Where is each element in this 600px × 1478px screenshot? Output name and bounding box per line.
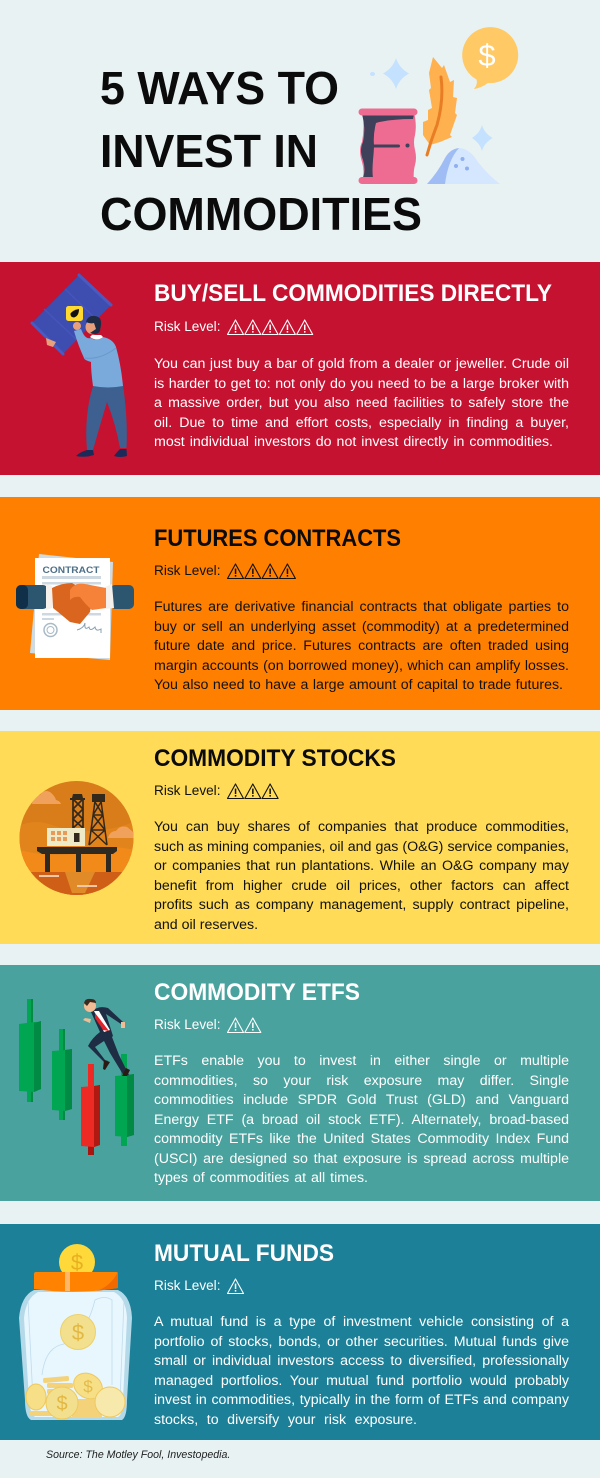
icon: dollar speech bubble xyxy=(462,27,518,89)
text block: commodities, so your risk exposure may differ. Single xyxy=(154,1072,569,1088)
text block: ETFs enable you to invest in either single or multiple xyxy=(154,1053,569,1069)
icon: glass jar with coins: $ xyxy=(71,1250,83,1275)
text block: a massive order, but you also need facilities to safely store the xyxy=(154,395,569,411)
risk level: one warning triangle xyxy=(227,1278,244,1294)
icon: barrel xyxy=(358,108,418,184)
text block: (USCI) are designed so that exposure is spread across multiple xyxy=(154,1150,569,1166)
text block: commodity ETFs like the United States Commodity Index Fund xyxy=(154,1131,569,1147)
risk level label: Risk Level: xyxy=(154,563,220,578)
panel: futures contracts xyxy=(0,497,600,710)
text block: Futures are derivative financial contracts that obligate parties to xyxy=(154,599,569,615)
text block xyxy=(154,599,569,693)
text block: benefit from higher crude oil prices, other factors can affect xyxy=(154,878,569,894)
text block: commodities include SPDR Gold Trust (GLD) and Vanguard xyxy=(154,1092,569,1108)
text block xyxy=(154,819,569,932)
panel: commodity stocks xyxy=(0,731,600,944)
risk level label: Risk Level: xyxy=(154,1278,220,1293)
risk level label: Risk Level: xyxy=(154,319,220,334)
text block: such as mining companies, oil and gas (O&G) service companies, xyxy=(154,838,569,854)
text block: or companies that run plantations. While an O&G company may xyxy=(154,858,569,874)
risk level: four warning triangles xyxy=(227,563,296,579)
risk level: two warning triangles xyxy=(227,1017,262,1033)
panel: commodity etfs xyxy=(0,965,600,1201)
title: COMMODITIES xyxy=(100,188,422,240)
text block: small or individual investors access to diversified, professionally xyxy=(154,1353,569,1369)
text block: portfolio of stocks, bonds, or other securities. Mutual funds give xyxy=(154,1334,569,1350)
icon: feather xyxy=(423,57,457,155)
risk level: five warning triangles xyxy=(227,319,314,335)
icon: glass jar with coins: $ xyxy=(56,1393,68,1415)
heading: COMMODITY STOCKS xyxy=(154,745,396,772)
icon: man carrying oil barrel xyxy=(30,273,127,457)
text block xyxy=(154,1314,570,1428)
title: INVEST IN xyxy=(100,125,318,177)
panel: mutual funds xyxy=(0,1224,600,1440)
text block: types of commodities at all times. xyxy=(154,1170,368,1186)
text block: You also need to have a large amount of capital to trade futures. xyxy=(154,677,563,693)
text block: most individual investors do not invest directly in commodities. xyxy=(154,434,553,450)
icon: glass jar with coins: $ xyxy=(72,1320,84,1345)
text block: Energy ETF (a broad oil stock ETF). Alternately, broad-based xyxy=(154,1112,569,1128)
heading: COMMODITY ETFS xyxy=(154,979,360,1006)
text block: stocks, to diversify your risk exposure. xyxy=(154,1412,417,1428)
text block: margin accounts (on borrowed money), which can amplify losses. xyxy=(154,658,569,674)
heading: MUTUAL FUNDS xyxy=(154,1240,334,1267)
risk level label: Risk Level: xyxy=(154,783,220,798)
source note: Source: The Motley Fool, Investopedia. xyxy=(46,1449,230,1461)
text block: invest in commodities, typically in the form of ETFs and company xyxy=(154,1392,569,1408)
icon: offshore oil rig xyxy=(20,781,134,895)
icon: contract and handshake: CONTRACT xyxy=(42,565,100,576)
text block: is harder to get to: not only do you need to be a large broker with xyxy=(154,376,569,392)
icon: candlestick chart with running businessman xyxy=(19,998,134,1155)
text block: managed portfolios. Your mutual fund portfolio would probably xyxy=(154,1372,569,1388)
icon: glass jar with coins: $ xyxy=(83,1377,93,1396)
icon: commodities illustration with barrel, feather, pile and dollar bubble xyxy=(358,27,518,184)
text block: buy or sell an underlying asset (commodity) at a predetermined xyxy=(154,618,569,634)
title xyxy=(100,62,422,240)
icon: dollar speech bubble: $ xyxy=(478,38,496,73)
text block: future date and price. Futures contracts are often traded using xyxy=(154,638,569,654)
text block xyxy=(154,356,569,450)
icon: glass jar with coins xyxy=(19,1244,132,1420)
risk level: three warning triangles xyxy=(227,783,279,799)
text block: You can just buy a bar of gold from a dealer or jeweller. Crude oil xyxy=(154,356,569,372)
icon: contract and handshake xyxy=(16,554,134,660)
text block: A mutual fund is a type of investment vehicle consisting of a xyxy=(154,1314,569,1330)
risk level label: Risk Level: xyxy=(154,1017,220,1032)
panel: buy/sell commodities directly xyxy=(0,262,600,475)
text block: oil. Due to time and effort costs, especially in finding a buyer, xyxy=(154,414,569,430)
title: 5 WAYS TO xyxy=(100,62,339,114)
icon: sparkles xyxy=(370,58,492,151)
icon: powder pile xyxy=(427,148,500,184)
text block xyxy=(154,1053,569,1186)
text block: and oil reserves. xyxy=(154,916,258,932)
text block: profits such as company management, supply contract pipeline, xyxy=(154,897,569,913)
text block: You can buy shares of companies that produce commodities, xyxy=(154,819,569,835)
